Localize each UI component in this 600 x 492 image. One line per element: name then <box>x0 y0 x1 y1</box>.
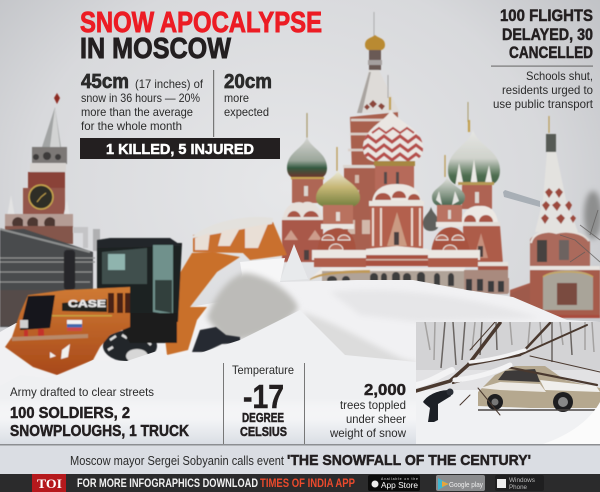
flights heading <box>500 7 593 62</box>
schools text: Schools shut, <box>526 69 593 83</box>
trees toppled stat: weight of snow <box>329 426 406 440</box>
snowfall stat text: snow in 36 hours — 20% <box>81 91 200 105</box>
loader lift arm and bucket <box>165 217 287 355</box>
snowfall stat text: 45cm <box>81 71 129 93</box>
loader rear wheel <box>103 330 157 363</box>
exhaust pipe <box>64 250 75 290</box>
foreground snow <box>0 310 416 444</box>
TOI logo: TOI <box>37 477 62 491</box>
Windows Phone badge: Windows <box>509 478 535 484</box>
loader body: CASE <box>68 298 106 310</box>
temperature stat: DEGREE <box>242 410 284 425</box>
title <box>80 7 322 65</box>
expected snowfall text: more <box>224 91 249 105</box>
temperature stat: Temperature <box>232 363 294 377</box>
App Store badge <box>368 475 420 491</box>
orange snow loader <box>5 217 287 375</box>
expected snowfall text: expected <box>224 105 269 119</box>
trees toppled stat: under sheer <box>346 412 406 426</box>
footer call to action: FOR MORE INFOGRAPHICS DOWNLOAD <box>77 476 258 490</box>
cathedral base arcade <box>310 246 508 294</box>
expected snowfall text: 20cm <box>224 71 272 93</box>
cathedral right green dome tower <box>448 102 509 293</box>
army text: Army drafted to clear streets <box>10 385 154 399</box>
Saint Basil's Cathedral <box>282 12 509 294</box>
Google Play badge: Google play <box>449 480 483 489</box>
App Store badge: Available on the <box>381 477 418 481</box>
title: IN MOSCOW <box>80 33 232 65</box>
schools text: use public transport <box>493 97 594 111</box>
footer call to action: TIMES OF INDIA APP <box>260 476 355 490</box>
snowfall stat text <box>81 71 204 133</box>
temperature stat: -17 <box>243 378 284 415</box>
army text: SNOWPLOUGHS, 1 TRUCK <box>10 423 190 440</box>
fallen tree <box>416 322 600 415</box>
Google Play badge <box>436 475 485 491</box>
cathedral central red and white dome tower <box>360 75 424 250</box>
quote strip: Moscow mayor Sergei Sobyanin calls event <box>70 454 284 468</box>
TOI logo <box>32 474 66 492</box>
casualties bar <box>80 138 280 159</box>
bare tree at right edge <box>560 191 600 262</box>
schools text: residents urged to <box>502 83 593 97</box>
army text <box>10 385 190 440</box>
temperature stat <box>232 363 294 439</box>
temperature stat: CELSIUS <box>240 424 287 439</box>
trees toppled stat: trees toppled <box>340 398 406 412</box>
cathedral central tent tower <box>343 12 400 252</box>
cathedral left green dome tower <box>282 113 327 262</box>
person bending <box>423 388 454 422</box>
flights heading: 100 FLIGHTS <box>500 7 593 25</box>
snow fade behind bottom text <box>0 398 416 445</box>
quote strip: 'THE SNOWFALL OF THE CENTURY' <box>287 452 531 469</box>
schools text <box>493 69 594 111</box>
cathedral gold dotted dome tower <box>316 147 360 254</box>
Kremlin Spasskaya clock tower <box>5 93 73 244</box>
snowfall stat text: more than the average <box>81 105 193 119</box>
footer bar <box>0 474 600 492</box>
inset photo: tree fallen on car <box>416 322 600 444</box>
trees toppled stat <box>329 382 406 440</box>
snowfall stat text: (17 inches) of <box>135 77 204 91</box>
trees toppled stat: 2,000 <box>364 382 406 399</box>
loader cab <box>97 238 182 343</box>
expected snowfall text <box>224 71 272 119</box>
crane arm <box>503 190 540 207</box>
right church tower <box>510 116 600 318</box>
scaffolding behind the loader <box>0 227 100 327</box>
army text: 100 SOLDIERS, 2 <box>10 405 130 422</box>
cathedral small green dome tower <box>431 155 470 254</box>
App Store badge: App Store <box>381 480 418 490</box>
loader body <box>5 287 130 375</box>
Windows Phone badge: Phone <box>509 485 528 491</box>
loader front wheel <box>192 327 240 352</box>
title: SNOW APOCALYPSE <box>80 7 322 39</box>
snowfall stat text: for the whole month <box>81 119 182 133</box>
casualties bar: 1 KILLED, 5 INJURED <box>106 141 254 158</box>
parked beige car <box>478 366 600 412</box>
snow mound <box>0 244 600 444</box>
quote strip <box>0 444 600 474</box>
cathedral small dark dome <box>423 207 439 231</box>
Windows Phone badge <box>495 475 544 491</box>
